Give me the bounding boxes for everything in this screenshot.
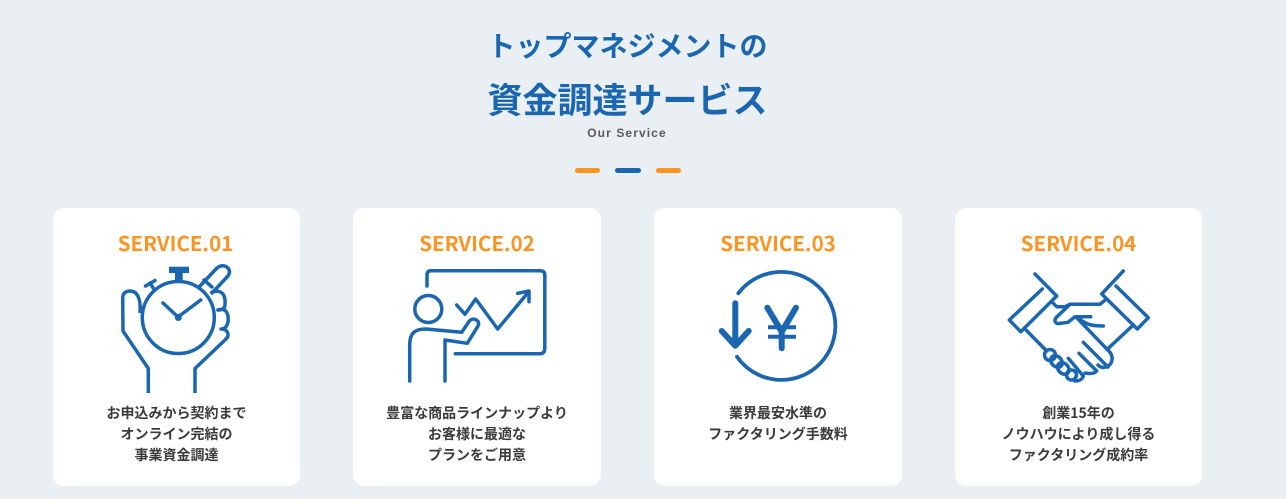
service 02 description [386,403,568,465]
subtitle: Our Service [587,126,667,140]
service 03 description [708,403,848,444]
service 01 description: 事業資金調達 [134,445,218,465]
title line 2: 資金調達サービス [487,82,768,121]
service 01 heading: SERVICE.01 [118,227,233,257]
panel: service 03 [654,208,902,486]
service 03 description: ファクタリング手数料 [708,424,848,444]
service 03 description: 業界最安水準の [729,403,827,423]
service 04 description: 創業15年の [1042,403,1115,423]
service 02 description: お客様に最適な [428,424,526,444]
service 04 heading: SERVICE.04 [1021,227,1136,257]
service 02 description: プランをご用意 [428,445,526,465]
icon: handshake [1008,269,1150,383]
panel: service 01 [53,208,300,486]
icon: yen with down arrow [718,270,838,382]
title line 1: トップマネジメントの [487,31,768,62]
service 02 description: 豊富な商品ラインナップより [386,403,568,423]
panel: service 02 [353,208,601,486]
service 04 description: ファクタリング成約率 [1009,445,1148,465]
service 01 description: お申込みから契約まで [106,403,246,423]
decorative dashes [575,168,681,173]
panel: service 04 [955,208,1202,486]
icon: stopwatch in hand [120,264,232,393]
service 04 description [1002,403,1155,465]
service 01 description: オンライン完結の [120,424,232,444]
service 02 heading: SERVICE.02 [419,227,535,257]
icon: presenter with chart board [408,269,547,383]
service 01 description [106,403,246,465]
service 04 description: ノウハウにより成し得る [1002,424,1155,444]
service 03 heading: SERVICE.03 [720,227,836,257]
